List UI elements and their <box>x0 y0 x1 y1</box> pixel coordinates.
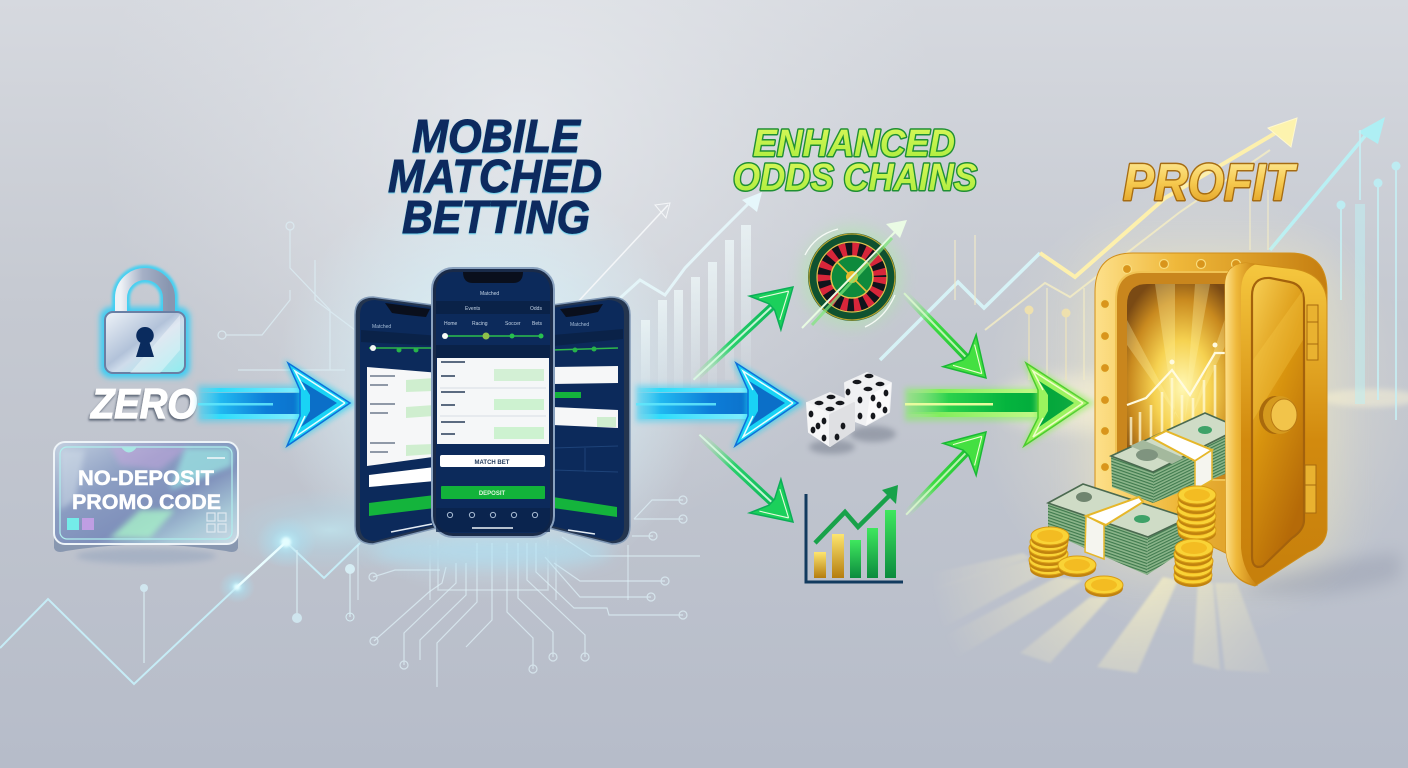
vault door <box>1225 263 1327 586</box>
screen header text: Racing <box>472 321 488 327</box>
arrow: up to roulette <box>678 270 809 397</box>
screen header text: Odds <box>530 306 542 312</box>
phone: center <box>432 268 554 537</box>
screen header text <box>444 291 543 327</box>
center background chart with bars <box>575 192 762 390</box>
screen header text: Home <box>444 321 458 327</box>
promo code text: NO-DEPOSIT <box>78 467 214 490</box>
bottom-left rising line chart <box>0 537 360 684</box>
background circuit lines <box>218 222 700 687</box>
card code blocks <box>207 513 226 532</box>
vault hinges <box>1305 305 1318 513</box>
icon: padlock <box>100 274 190 378</box>
green button <box>441 486 545 499</box>
vault rivets <box>1100 260 1240 472</box>
icon: dice <box>807 373 896 454</box>
icon: bar chart with arrow <box>806 485 903 582</box>
card colour chips <box>67 518 94 530</box>
heading: enhanced odds chains: ODDS CHAINS <box>733 157 977 199</box>
arrow: phones to dice <box>636 360 805 449</box>
vault frame <box>1095 253 1327 560</box>
arrow: dice to vault <box>905 360 1095 449</box>
heading: mobile matched betting: MOBILE <box>412 110 581 162</box>
arrow: roulette to profit <box>887 277 1003 394</box>
phone: left: Matched <box>372 324 391 330</box>
phone: right: Matched <box>570 322 589 328</box>
screen header text: Events <box>465 306 481 312</box>
icon: roulette wheel <box>802 220 907 328</box>
upper money stack <box>1111 413 1240 503</box>
label: ZERO: ZERO <box>90 380 197 427</box>
screen header text: Matched <box>480 291 499 297</box>
heading: profit: PROFIT <box>1123 154 1298 212</box>
phone: right <box>545 297 630 544</box>
phones <box>355 268 630 600</box>
coin stacks <box>1029 486 1216 597</box>
heading: enhanced odds chains <box>733 123 977 199</box>
arrow: chart to profit <box>890 416 1003 531</box>
arrow: down to chart <box>684 418 809 539</box>
golden rays below the vault <box>900 553 1270 673</box>
white button <box>440 455 545 467</box>
panel: no-deposit promo code card <box>54 442 238 564</box>
lower money stack <box>1048 484 1188 575</box>
heading: mobile matched betting: MATCHED <box>388 150 602 202</box>
phone: left <box>355 297 440 544</box>
green button: DEPOSIT <box>479 491 506 497</box>
phone nav icons <box>447 512 538 518</box>
vault interior <box>1116 272 1230 480</box>
vault dial <box>1259 396 1297 434</box>
bets panel <box>437 358 549 444</box>
phone reflection <box>358 536 628 600</box>
heading: enhanced odds chains: ENHANCED <box>753 123 955 165</box>
icon: gold vault with money <box>1029 250 1340 597</box>
heading: mobile matched betting: BETTING <box>402 191 590 243</box>
right background chart lines <box>880 117 1400 420</box>
white button: MATCH BET <box>475 460 510 466</box>
screen header text: Soccer <box>505 321 521 327</box>
progress stepper <box>442 332 544 340</box>
screen header text: Bets <box>532 321 543 327</box>
arrow: promo to phones <box>198 360 357 449</box>
heading: mobile matched betting <box>388 110 602 243</box>
promo code text: PROMO CODE <box>72 491 221 514</box>
